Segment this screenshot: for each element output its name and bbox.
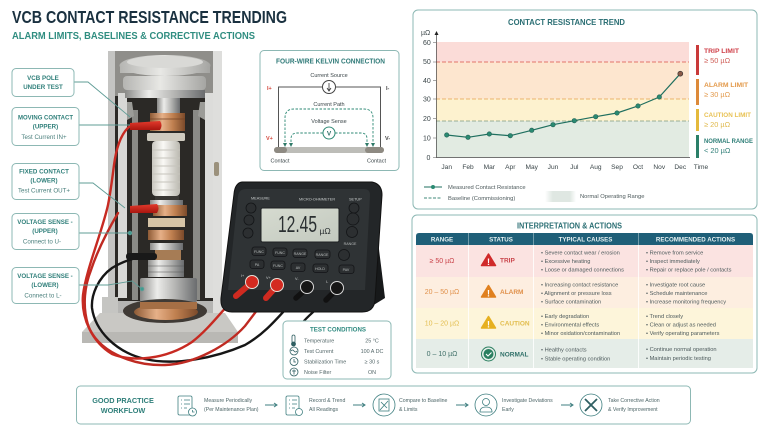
callout: voltage sense lower: (LOWER) [31, 282, 59, 289]
limit legend: TRIP LIMIT [704, 48, 740, 55]
row: normal: • Healthy contacts [541, 348, 587, 354]
Kelvin circuit diagram: Contact [367, 158, 386, 164]
row: caution: • Environmental effects [541, 322, 599, 328]
step 3: & Limits [399, 407, 418, 413]
step 1: (Per Maintenance Plan) [204, 407, 259, 413]
line chart: Sep [611, 164, 623, 171]
callout: fixed contact: (LOWER) [30, 178, 58, 184]
table header: TYPICAL CAUSES [559, 236, 612, 244]
callout: voltage sense upper [12, 214, 79, 250]
row: caution [416, 308, 753, 339]
condition rows: Stabilization Time [304, 360, 346, 366]
callout: moving contact: (UPPER) [33, 124, 58, 130]
callout: VCB pole under test: UNDER TEST [23, 84, 63, 91]
heading: workflow: GOOD PRACTICE [92, 396, 154, 405]
row: trip [416, 245, 753, 277]
line chart: Mar [484, 164, 496, 171]
heading: test conditions: TEST CONDITIONS [310, 326, 366, 334]
line chart: Feb [462, 164, 474, 171]
row: alarm [416, 277, 753, 308]
callout: voltage sense lower: Connect to L- [24, 292, 62, 300]
photo: VCB pole assembly [82, 51, 238, 343]
Kelvin circuit diagram: Voltage Sense [311, 119, 347, 125]
row: alarm: • Schedule maintenance [646, 291, 707, 297]
row: trip: • Excessive heating [541, 259, 590, 265]
limit legend: NORMAL RANGE [704, 138, 753, 145]
row: trip: • Loose or damaged connections [541, 268, 624, 274]
meter keys: FUNC [275, 251, 285, 255]
callout: voltage sense lower [12, 268, 79, 304]
meter keys: FUNC [254, 250, 264, 254]
meter terminals: V- [295, 277, 299, 281]
step 5: Take Corrective Action [608, 398, 660, 404]
table header [416, 233, 753, 245]
meter keys: FUNC [273, 264, 283, 268]
callout: fixed contact [12, 164, 79, 200]
meter terminals [236, 274, 344, 300]
heading: Kelvin: FOUR-WIRE KELVIN CONNECTION [276, 58, 385, 66]
row: alarm: • Increase monitoring frequency [646, 300, 726, 306]
meter keys: HOLD [315, 267, 325, 271]
row: normal [416, 339, 753, 368]
condition rows [304, 338, 383, 376]
step 3: Compare to Baseline [399, 398, 448, 404]
line chart: Nov [653, 164, 666, 171]
line chart: 0 [426, 155, 430, 162]
Kelvin circuit diagram: Contact [271, 158, 290, 164]
heading: chart: CONTACT RESISTANCE TREND [508, 17, 625, 27]
Kelvin circuit diagram: V- [385, 136, 390, 142]
panel: test conditions [283, 321, 391, 379]
subtitle: ALARM LIMITS, BASELINES & CORRECTIVE ACTIONS [12, 31, 255, 42]
heading: interpretation: INTERPRETATION & ACTIONS [517, 222, 623, 230]
Kelvin circuit diagram: I- [386, 86, 390, 92]
micro-ohmmeter: MICRO-OHMMETER [299, 198, 335, 202]
step 1: Measure Periodically [204, 398, 253, 404]
meter display [261, 208, 339, 242]
row: normal: • Stable operating condition [541, 356, 610, 362]
callout: voltage sense upper: Connect to U- [23, 238, 61, 246]
panel: contact resistance trend [413, 10, 757, 209]
row: trip: • Inspect immediately [646, 259, 700, 265]
arrow 4 [561, 403, 573, 407]
chart legend: Measured Contact Resistance [448, 185, 526, 191]
chart legend [424, 185, 644, 202]
step 3 [373, 394, 448, 416]
row: caution: • Trend closely [646, 314, 683, 320]
arrow 3 [456, 403, 468, 407]
line chart: Jan [441, 164, 452, 171]
micro-ohmmeter: MEASURE [251, 196, 270, 200]
row: normal: 0 – 10 µΩ [427, 351, 457, 358]
callout leaders [74, 82, 144, 291]
line chart: Dec [674, 164, 687, 171]
condition icons [290, 335, 298, 376]
panel: good practice workflow [76, 386, 690, 424]
line chart: 50 [423, 59, 431, 66]
step 1 [178, 396, 259, 416]
row: caution: • Early degradation [541, 314, 589, 320]
row: alarm: ! [487, 288, 490, 298]
limit legend: < 20 µΩ [704, 146, 731, 155]
callout: moving contact: Test Current IN+ [21, 134, 67, 141]
step 4 [475, 394, 553, 416]
row: caution: CAUTION [500, 320, 530, 328]
callout: fixed contact: Test Current OUT+ [18, 188, 70, 194]
panel: four-wire Kelvin connection [260, 50, 399, 170]
meter keys [243, 203, 359, 274]
row: caution: ! [487, 320, 490, 330]
arrow 2 [353, 403, 365, 407]
line chart: µΩ [421, 30, 430, 37]
limit legend: ≥ 30 µΩ [704, 90, 731, 99]
row: trip: ≥ 50 µΩ [430, 258, 454, 265]
arrow 1 [265, 403, 277, 407]
condition rows: Test Current [304, 349, 334, 355]
line chart: May [525, 164, 539, 171]
limit legend: CAUTION LIMIT [704, 112, 752, 119]
row: normal: • Maintain periodic testing [646, 356, 711, 362]
micro-ohmmeter [221, 182, 385, 312]
Kelvin circuit diagram: V [327, 130, 332, 138]
line chart: 30 [423, 96, 431, 104]
callout: voltage sense lower: VOLTAGE SENSE - [17, 273, 73, 280]
row: alarm: • Alignment or pressure loss [541, 291, 612, 297]
callout: moving contact: MOVING CONTACT [18, 114, 73, 122]
line chart: 10 [423, 136, 431, 142]
condition rows: 100 A DC [361, 349, 383, 355]
Kelvin circuit diagram: V+ [266, 136, 273, 142]
meter terminals: V+ [266, 276, 272, 280]
meter keys: RANGE [294, 252, 307, 256]
line chart [421, 30, 709, 171]
chart legend: Baseline (Commissioning) [448, 196, 515, 202]
Kelvin circuit diagram: Current Source [310, 73, 348, 79]
line chart: Jun [548, 164, 559, 171]
table header: RECOMMENDED ACTIONS [656, 236, 735, 244]
row: trip: • Repair or replace pole / contacts [646, 268, 732, 274]
callout: voltage sense upper: VOLTAGE SENSE - [17, 219, 73, 226]
callout: moving contact [12, 108, 79, 146]
condition rows: ≥ 30 s [365, 360, 380, 366]
step 4: Investigate Deviations [502, 398, 553, 404]
heading: workflow [92, 396, 154, 415]
line chart: Apr [505, 164, 516, 171]
heading: workflow: WORKFLOW [101, 406, 145, 415]
step 2: Record & Trend [309, 398, 345, 404]
row: alarm: • Surface contamination [541, 300, 601, 306]
step 2: All Readings [309, 407, 339, 413]
meter display: 12.45 [278, 211, 317, 237]
line chart: Jul [570, 164, 579, 171]
step 4: Early [502, 407, 514, 413]
Kelvin circuit diagram [266, 73, 390, 164]
title: VCB CONTACT RESISTANCE TRENDING [12, 7, 287, 27]
condition rows: Temperature [304, 338, 334, 344]
row: trip: • Remove from service [646, 250, 703, 256]
line chart: Oct [633, 164, 643, 171]
row: caution: • Clean or adjust as needed [646, 322, 716, 328]
row: trip: ! [487, 257, 490, 267]
line chart: 60 [423, 40, 431, 47]
condition rows: Noise Filter [304, 370, 331, 376]
line chart: Time [694, 164, 709, 171]
row: alarm: 20 – 50 µΩ [425, 289, 459, 296]
row: trip: • Severe contact wear / erosion [541, 250, 620, 256]
step 5 [580, 394, 660, 416]
row: alarm: • Increasing contact resistance [541, 282, 618, 288]
meter keys: PA [255, 263, 260, 267]
row: normal: • Continue normal operation [646, 347, 717, 353]
row: caution: • Verify operating parameters [646, 331, 720, 337]
meter terminals: I- [326, 280, 329, 284]
meter terminals: I+ [241, 274, 245, 278]
meter keys: PAV [343, 268, 350, 272]
condition rows: ON [368, 370, 376, 376]
test leads [83, 126, 340, 365]
limit legend: ALARM LIMIT [704, 82, 749, 89]
callout: VCB pole under test: VCB POLE [27, 75, 59, 82]
Kelvin circuit diagram: Current Path [313, 102, 345, 108]
Kelvin circuit diagram: I+ [267, 86, 272, 92]
clips [126, 121, 162, 260]
meter display: µΩ [320, 226, 331, 236]
chart legend: Normal Operating Range [580, 194, 644, 200]
row: caution: • Minor oxidation/contamination [541, 331, 620, 337]
limit legend: ≥ 50 µΩ [704, 56, 731, 65]
table header: RANGE [431, 236, 453, 244]
step 2 [286, 396, 345, 416]
meter keys: AV [296, 266, 301, 270]
row: caution: 10 – 20 µΩ [425, 320, 459, 328]
condition rows: 25 °C [365, 338, 379, 344]
meter keys: RANGE [316, 253, 329, 257]
callout: fixed contact: FIXED CONTACT [19, 168, 69, 176]
row: alarm: • Investigate root cause [646, 282, 705, 288]
row: trip: TRIP [500, 258, 515, 264]
limit legend: ≥ 20 µΩ [704, 120, 731, 129]
line chart: Aug [590, 164, 602, 171]
callout: voltage sense upper: (UPPER) [32, 228, 58, 235]
table header: STATUS [489, 236, 513, 244]
line chart: 20 [423, 116, 431, 123]
limit legend [696, 45, 753, 158]
meter keys: RANGE [344, 242, 357, 246]
line chart: 40 [423, 78, 431, 85]
micro-ohmmeter: SETUP [349, 198, 362, 202]
callout: VCB pole under test [12, 68, 74, 96]
step 5: & Verify Improvement [608, 407, 658, 413]
row: alarm: ALARM [500, 289, 523, 296]
panel: interpretation and actions [412, 215, 757, 373]
row: normal: NORMAL [500, 352, 529, 358]
